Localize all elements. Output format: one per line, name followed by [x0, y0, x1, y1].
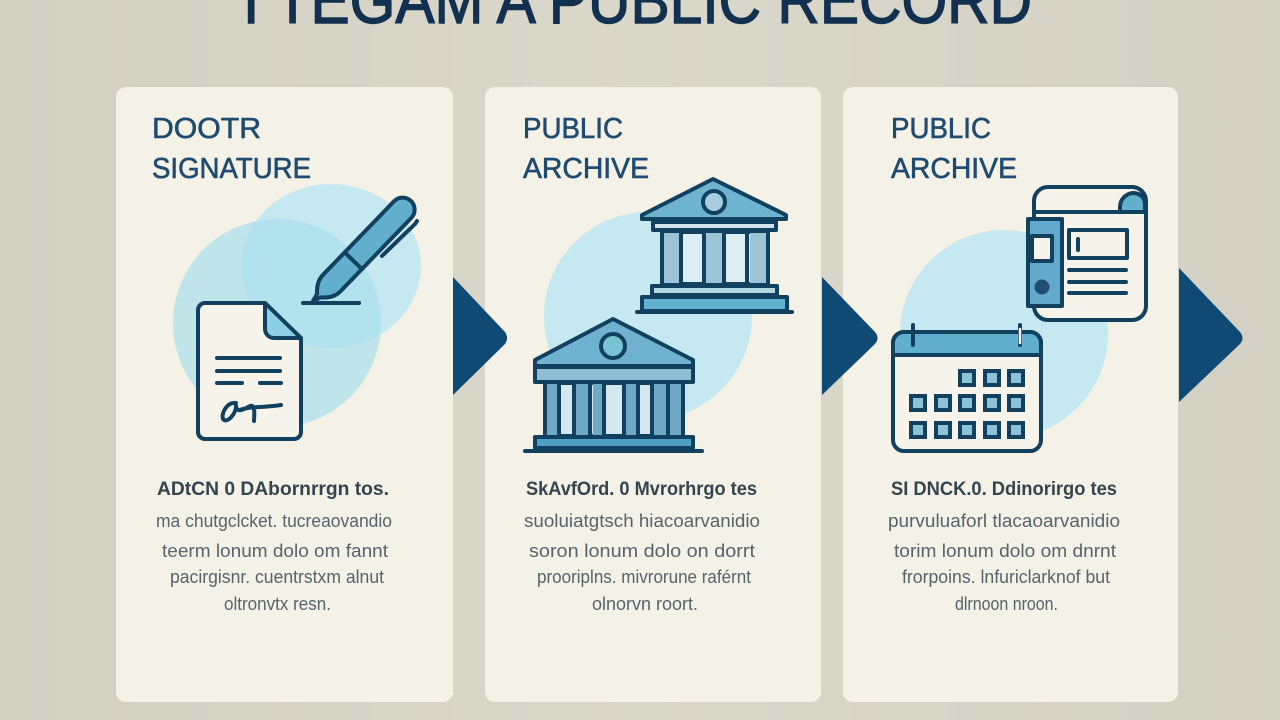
heading: public archive: PUBLIC — [523, 113, 623, 145]
body text: SI DNCK.0. Ddinorirgo tes — [891, 479, 1117, 500]
heading: doctor signature: DOOTR — [152, 113, 261, 145]
body text: SkAvfOrd. 0 Mvrorhrgo tes — [526, 479, 757, 500]
body text — [888, 479, 1120, 614]
body text: prooriplns. mivrorune raférnt — [537, 567, 751, 587]
icon: calendar — [893, 325, 1041, 451]
heading: public archive — [891, 113, 1017, 185]
icon: binder and record — [1028, 187, 1146, 320]
heading: doctor signature: SIGNATURE — [152, 153, 311, 185]
icon: pen — [303, 193, 420, 310]
body text — [524, 479, 760, 614]
background circle — [544, 212, 752, 420]
body text — [156, 479, 392, 614]
calendar date squares — [911, 371, 1023, 437]
body text: teerm lonum dolo om fannt — [162, 541, 388, 561]
body text: purvuluaforl tlacaoarvanidio — [888, 511, 1120, 531]
heading: public archive: ARCHIVE — [891, 153, 1017, 185]
body text: soron lonum dolo on dorrt — [529, 541, 755, 561]
background circles — [173, 184, 421, 427]
body text: oltronvtx resn. — [224, 594, 331, 614]
arrow 1 — [453, 277, 507, 395]
body text: pacirgisnr. cuentrstxm alnut — [170, 567, 384, 587]
panel: doctor signature — [116, 87, 453, 702]
heading: public archive: PUBLIC — [891, 113, 991, 145]
panel: public archive with calendar — [843, 87, 1178, 702]
body text: olnorvn roort. — [592, 594, 698, 614]
background circle — [900, 230, 1108, 438]
body text: ma chutgclcket. tucreaovandio — [156, 511, 392, 531]
body text: torim lonum dolo om dnrnt — [894, 541, 1116, 561]
body text: dlrnoon nroon. — [955, 594, 1058, 614]
heading: public archive — [523, 113, 649, 185]
icon: upper archive building — [637, 179, 792, 312]
body text: suoluiatgtsch hiacoarvanidio — [524, 511, 760, 531]
heading: public archive: ARCHIVE — [523, 153, 649, 185]
heading: doctor signature — [152, 113, 311, 185]
icon: lower archive building — [525, 319, 702, 451]
body text: ADtCN 0 DAbornrrgn tos. — [157, 479, 389, 500]
arrow 3 — [1179, 268, 1242, 402]
icon: signed document — [198, 303, 301, 439]
body text: frorpoins. lnfuriclarknof but — [902, 567, 1110, 587]
panel: public archive — [485, 87, 821, 702]
arrow 2 — [822, 277, 878, 395]
